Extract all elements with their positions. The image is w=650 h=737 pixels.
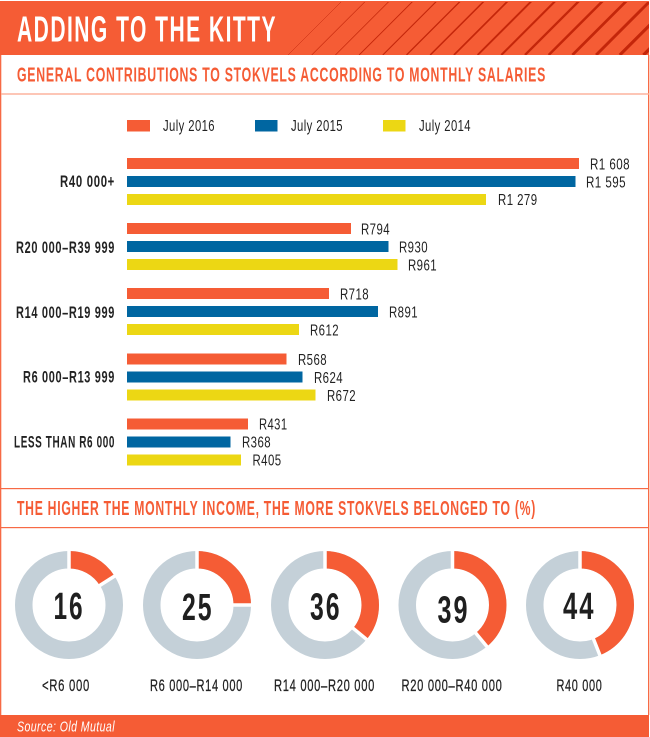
donut: under R6 000, 16: [24, 549, 116, 695]
group: R40 000+: [60, 156, 630, 209]
group: R14 000–R19 999: R891: [389, 304, 418, 322]
donut: R40 000, 44: R40 000: [556, 677, 602, 695]
donut: under R6 000, 16: <R6 000: [42, 677, 90, 695]
group: R20 000–R39 999: R794: [361, 222, 390, 238]
donut: R20 000–R40 000, 39: [402, 549, 502, 695]
group: Less than R6 000: LESS THAN R6 000: [14, 434, 115, 452]
donut: R14 000–R20 000, 36: [274, 549, 375, 695]
donut: R6 000–R14 000, 25: R6 000–R14 000: [150, 677, 243, 695]
group: R20 000–R39 999: R930: [399, 240, 428, 256]
group: R14 000–R19 999: R14 000–R19 999: [16, 304, 115, 322]
legend: July 2016: [163, 118, 215, 135]
donut: R14 000–R20 000, 36: R14 000–R20 000: [274, 677, 375, 695]
donut: under R6 000, 16: 16: [54, 586, 84, 628]
donut: R20 000–R40 000, 39: R20 000–R40 000: [402, 677, 502, 695]
group: R20 000–R39 999: [16, 222, 437, 274]
group: Less than R6 000: R405: [252, 453, 282, 470]
donut: R6 000–R14 000, 25: 25: [182, 587, 214, 629]
group: R20 000–R39 999: R961: [408, 258, 437, 274]
donut: R20 000–R40 000, 39: 39: [438, 590, 470, 632]
group: Less than R6 000: [14, 417, 288, 470]
bar chart: contributions by salary: [14, 156, 630, 470]
group: R6 000–R13 999: R624: [314, 370, 343, 387]
donut: R6 000–R14 000, 25: [150, 549, 253, 695]
group: R20 000–R39 999: R20 000–R39 999: [16, 239, 115, 257]
group: R14 000–R19 999: [16, 286, 418, 340]
group: Less than R6 000: R368: [242, 435, 271, 452]
group: R40 000+: R1 279: [498, 192, 538, 209]
footer bar with source: [0, 715, 649, 737]
group: R14 000–R19 999: R612: [310, 322, 339, 340]
group: R6 000–R13 999: R672: [327, 388, 356, 405]
legend: July 2014: [419, 118, 471, 135]
group: R14 000–R19 999: R718: [340, 286, 369, 304]
legend: [127, 118, 471, 135]
group: R40 000+: R1 608: [590, 156, 630, 174]
donut: R40 000, 44: [535, 549, 625, 695]
source text: Source: Old Mutual: [17, 718, 115, 736]
group: R40 000+: R1 595: [586, 174, 626, 192]
legend: July 2015: [291, 118, 343, 135]
group: R40 000+: R40 000+: [60, 173, 115, 191]
donut: R40 000, 44: 44: [563, 586, 596, 628]
group: R6 000–R13 999: R6 000–R13 999: [23, 369, 115, 387]
group: R6 000–R13 999: R568: [298, 352, 327, 369]
group: R6 000–R13 999: [23, 352, 356, 405]
title: ADDING TO THE KITTY: [17, 9, 277, 50]
donut: R14 000–R20 000, 36: 36: [310, 586, 342, 628]
header banner: [0, 0, 650, 55]
group: Less than R6 000: R431: [259, 417, 288, 434]
